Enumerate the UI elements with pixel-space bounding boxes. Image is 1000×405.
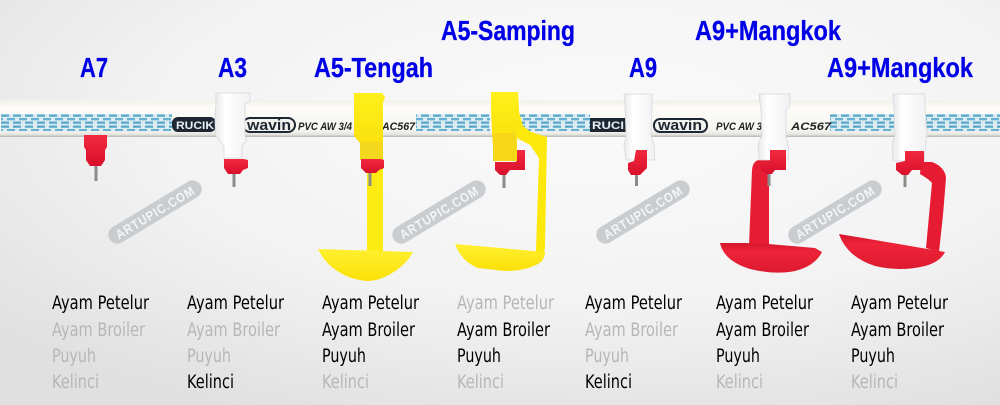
pipe print right: wavin: [657, 117, 702, 134]
pipe print left: RUCIK: [176, 120, 214, 132]
watermark 1: ARTUPIC.COM: [113, 183, 198, 242]
title A5-Tengah: A5-Tengah: [314, 52, 433, 83]
watermark 4: ARTUPIC.COM: [793, 183, 878, 242]
list A9+Mangkok centre: Kelinci: [716, 372, 763, 393]
list A5-Tengah: Puyuh: [322, 346, 366, 367]
list A9: Ayam Broiler: [585, 320, 678, 341]
list A9+Mangkok centre: [716, 293, 813, 393]
list A9+Mangkok right: Ayam Petelur: [851, 293, 948, 314]
list A5-Tengah: [322, 293, 419, 393]
pipe pattern band: [1, 114, 1000, 131]
list A9: [585, 293, 682, 393]
pipe: [0, 100, 1000, 137]
title A5-Samping: A5-Samping: [441, 15, 575, 46]
title A9+Mangkok lower: A9+Mangkok: [827, 52, 973, 83]
pipe print right: [590, 117, 832, 134]
drinker A5-Samping: [455, 92, 547, 271]
title A9+Mangkok upper: A9+Mangkok: [695, 15, 841, 46]
nipple A3: [215, 93, 250, 187]
list A5-Samping: Kelinci: [457, 372, 504, 393]
nipple A9: [624, 94, 655, 186]
arm: [515, 112, 547, 258]
list A9+Mangkok right: Ayam Broiler: [851, 320, 944, 341]
nipple: [361, 159, 384, 173]
list A7: Puyuh: [52, 346, 96, 367]
drinker A5-Tengah: [318, 93, 413, 281]
list A5-Tengah: Kelinci: [322, 372, 369, 393]
list A9+Mangkok right: Puyuh: [851, 346, 895, 367]
watermarks: [105, 177, 885, 247]
clip: [892, 94, 927, 161]
list A5-Samping: Puyuh: [457, 346, 501, 367]
arm: [920, 162, 946, 252]
pipe print left: AC567: [381, 121, 416, 133]
watermark 2: ARTUPIC.COM: [397, 183, 482, 242]
list A9+Mangkok right: [851, 293, 948, 393]
clip: [354, 93, 385, 160]
stem: [367, 168, 383, 252]
watermark 3: ARTUPIC.COM: [601, 183, 686, 242]
list A7: Ayam Petelur: [52, 293, 149, 314]
list A9+Mangkok centre: Ayam Petelur: [716, 293, 813, 314]
bowl: [720, 243, 822, 273]
nipple A7: [84, 135, 107, 181]
bowl: [839, 234, 945, 269]
title A3: A3: [218, 52, 247, 83]
list A7: [52, 293, 149, 393]
list A9+Mangkok right: Kelinci: [851, 372, 898, 393]
pipe print right: PVC AW 3: [716, 121, 762, 133]
bowl: [318, 249, 413, 281]
list A5-Tengah: Ayam Petelur: [322, 293, 419, 314]
clip: [491, 92, 520, 161]
bowl: [455, 244, 545, 271]
title A9: A9: [629, 52, 657, 83]
list A5-Tengah: Ayam Broiler: [322, 320, 415, 341]
title A7: A7: [80, 52, 108, 83]
list A5-Samping: Ayam Petelur: [457, 293, 554, 314]
list A9: Kelinci: [585, 372, 632, 393]
list A3: [187, 293, 284, 393]
nipple: [761, 150, 786, 174]
drinker A9 + Mangkok right: [839, 94, 946, 269]
pipe print left: wavin: [246, 117, 291, 134]
list A7: Kelinci: [52, 372, 99, 393]
list A3: Ayam Broiler: [187, 320, 280, 341]
pipe print left: [172, 117, 416, 134]
pipe print left: PVC AW 3/4: [298, 121, 352, 133]
clip: [758, 94, 790, 160]
stem: [749, 160, 769, 246]
nipple: [896, 151, 924, 175]
pipe print right: AC567: [790, 121, 832, 133]
list A9+Mangkok centre: Puyuh: [716, 346, 760, 367]
list A5-Samping: [457, 293, 554, 393]
list A3: Kelinci: [187, 372, 234, 393]
list A3: Ayam Petelur: [187, 293, 284, 314]
list A7: Ayam Broiler: [52, 320, 145, 341]
list A5-Samping: Ayam Broiler: [457, 320, 550, 341]
list A9: Ayam Petelur: [585, 293, 682, 314]
list A9+Mangkok centre: Ayam Broiler: [716, 320, 809, 341]
red nipple: [495, 150, 525, 175]
pipe print right: RUCI: [592, 120, 624, 132]
list A3: Puyuh: [187, 346, 231, 367]
list A9: Puyuh: [585, 346, 629, 367]
drinker A9 + Mangkok centre: [720, 94, 822, 273]
